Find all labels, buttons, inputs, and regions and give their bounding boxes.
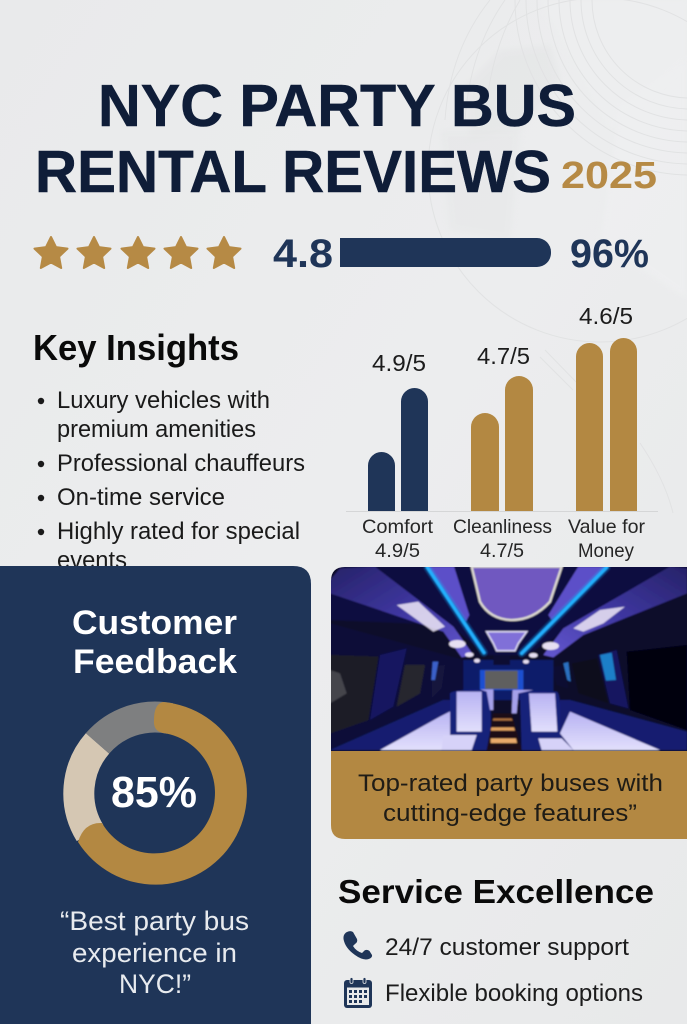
key insights list (38, 387, 305, 574)
ceiling base (330, 567, 687, 655)
bar value labels: 4.6/5 (579, 303, 633, 329)
led strips (427, 567, 607, 653)
right sofa (560, 700, 687, 750)
left ceiling panel (330, 567, 473, 657)
customer quote (60, 906, 249, 999)
bar value labels (372, 303, 633, 376)
bar value labels: 4.9/5 (372, 350, 426, 376)
feedback heading: Feedback (73, 643, 237, 681)
side walls (330, 623, 463, 750)
bar axis labels: 4.7/5 (480, 540, 524, 562)
icon: calendar (344, 978, 372, 1008)
windows (330, 655, 378, 733)
key insights list: Professional chauffeurs (57, 450, 305, 477)
center ceiling panel (472, 567, 562, 620)
key insights list: events (57, 547, 127, 574)
bar value labels: 4.7/5 (477, 343, 530, 369)
star rating (34, 237, 240, 268)
key insights heading: Key Insights (33, 327, 239, 368)
caption text: Top-rated party buses with (358, 770, 663, 797)
customer quote: “Best party bus (60, 906, 249, 936)
donut chart (78, 702, 247, 885)
bar axis labels: Cleanliness (453, 516, 552, 538)
bar axis labels: Comfort (362, 516, 434, 538)
service item: booking: Flexible booking options (385, 980, 643, 1007)
panel: customer feedback (0, 566, 311, 1024)
ceiling lights (397, 602, 625, 664)
customer quote: experience in (72, 938, 237, 968)
bar axis labels: Money (578, 540, 634, 562)
bar axis labels: 4.9/5 (375, 540, 420, 562)
title: RENTAL REVIEWS (35, 139, 551, 205)
aisle (487, 713, 522, 750)
bar chart (346, 303, 658, 562)
feedback heading (72, 604, 237, 681)
service excellence heading: Service Excellence (338, 874, 654, 911)
comfort bars (368, 388, 428, 511)
key insights list: premium amenities (57, 416, 256, 443)
right ceiling panel (543, 567, 687, 657)
value bars (576, 338, 637, 511)
rating percent: 96% (570, 232, 649, 276)
caption box (331, 751, 687, 839)
key insights list: Highly rated for special (57, 518, 300, 545)
bar axis labels: Value for (568, 516, 645, 538)
left sofa (330, 700, 457, 750)
key insights list: Luxury vehicles with (57, 387, 270, 414)
caption text: cutting-edge features” (383, 800, 637, 827)
pillars (370, 648, 407, 720)
photo: party bus interior (331, 567, 687, 751)
rating bar (340, 238, 551, 267)
icon: phone (343, 931, 372, 959)
rating value: 4.8 (273, 232, 333, 276)
cleanliness bars (471, 376, 533, 511)
customer quote: NYC!” (119, 969, 191, 999)
bar axis labels (362, 516, 645, 562)
title: NYC PARTY BUS (98, 73, 576, 139)
donut value: 85% (111, 768, 197, 817)
rear window (463, 660, 553, 700)
key insights list: On-time service (57, 484, 225, 511)
title (35, 73, 576, 205)
feedback heading: Customer (72, 604, 237, 642)
seats (450, 689, 491, 750)
service item: support: 24/7 customer support (385, 934, 629, 961)
year: 2025 (561, 155, 657, 197)
caption text (358, 770, 663, 827)
